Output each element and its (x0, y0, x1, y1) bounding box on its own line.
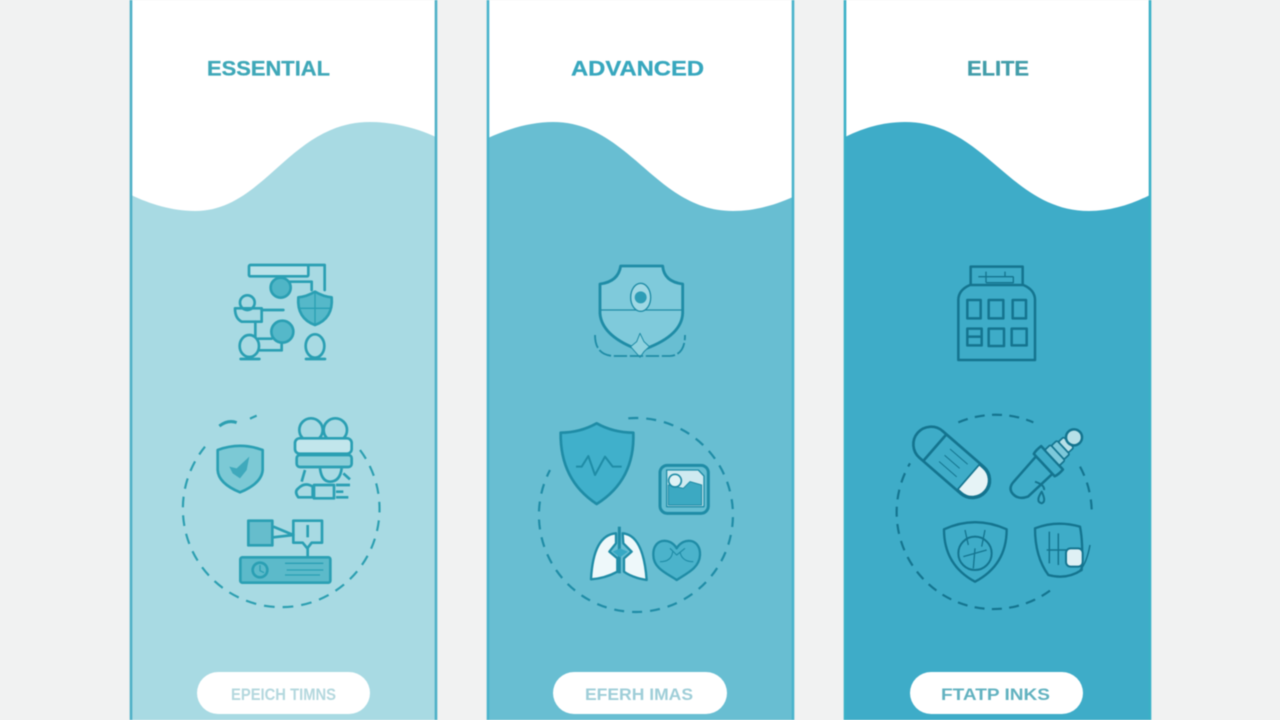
icon: shield with heart organ (944, 522, 1007, 582)
panel frame: essential (131, 0, 436, 720)
button: essential (197, 672, 370, 714)
heading: elite: ELITE (967, 56, 1029, 80)
panel: essential (131, 0, 436, 720)
icon: care network (235, 265, 332, 359)
panel: elite (845, 0, 1150, 720)
wave: elite (845, 122, 1150, 720)
icon: image report (660, 465, 708, 513)
icon: family group (295, 418, 352, 498)
panel frame: elite (845, 0, 1150, 720)
icon: dropper (1002, 420, 1091, 506)
wave: essential (131, 122, 436, 720)
panel frame: advanced (488, 0, 793, 720)
icon: lungs (591, 527, 647, 580)
dashed circle: advanced (539, 418, 733, 612)
heading: advanced: ADVANCED (571, 56, 704, 80)
button label: elite: FTATP INKS (941, 685, 1050, 704)
button: advanced (553, 672, 727, 714)
button label: advanced: EFERH IMAS (585, 685, 693, 704)
icon: shield with heart (218, 446, 263, 492)
icon: hand with bandage (1035, 524, 1090, 577)
wave: advanced (488, 122, 793, 720)
icon: capsule (906, 419, 997, 505)
button: elite (910, 672, 1083, 714)
icon: shield with pulse (561, 423, 633, 504)
icon: medicine organizer (958, 267, 1035, 360)
dashed circle: elite (897, 415, 1092, 609)
dashed circle: essential (183, 416, 380, 607)
icon: shield with figure (595, 266, 685, 357)
icon: heart (653, 541, 700, 580)
heading: essential: ESSENTIAL (207, 56, 330, 80)
icon: records and monitor (240, 521, 330, 583)
panel: advanced (488, 0, 793, 720)
button label: essential: EPEICH TIMNS (231, 685, 336, 704)
